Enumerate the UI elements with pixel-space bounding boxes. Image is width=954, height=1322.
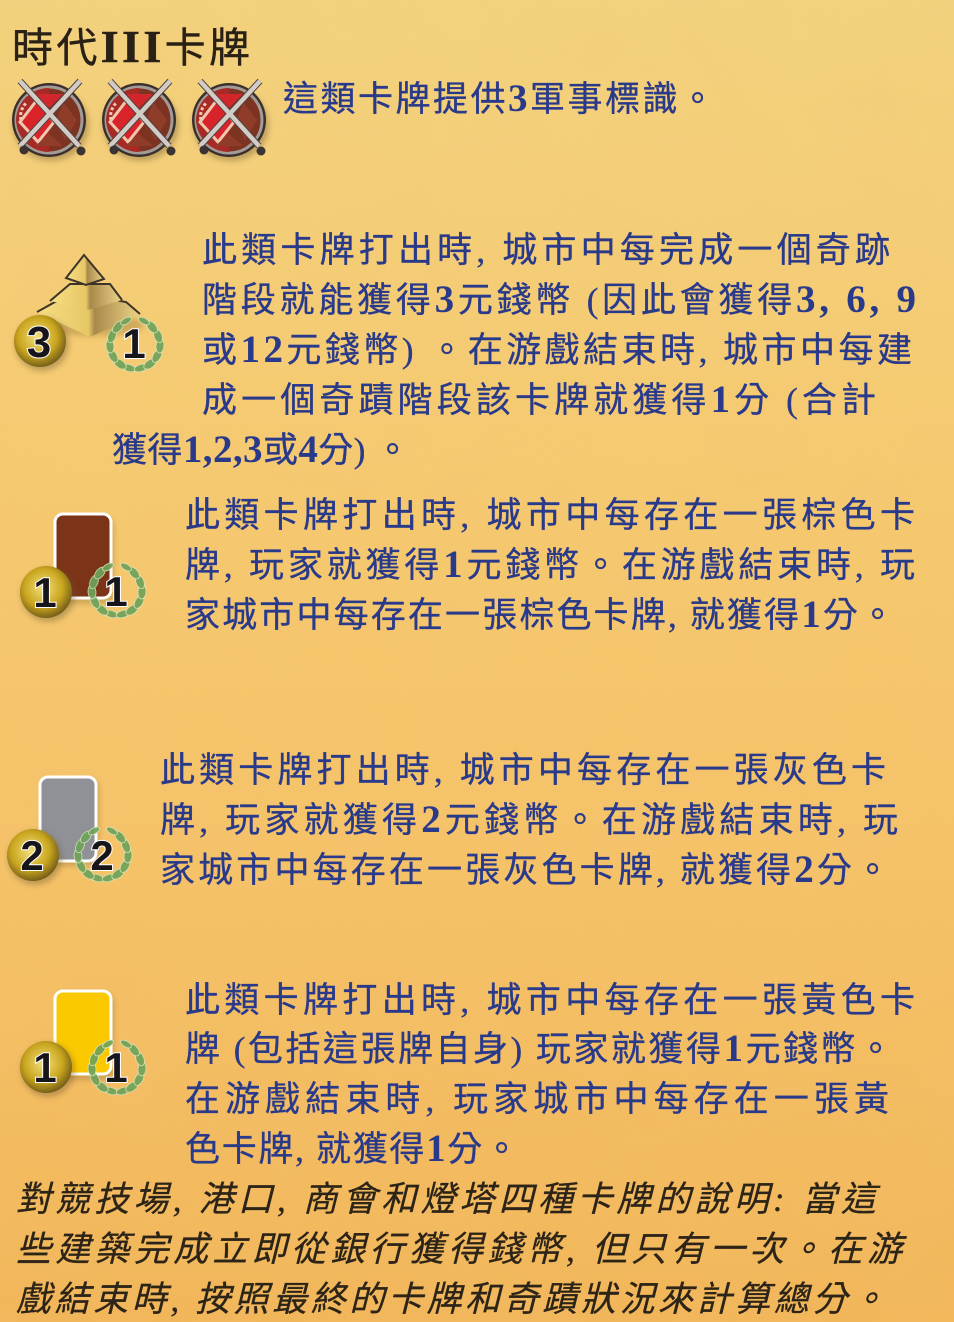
icon: grey card with coin 2 and laurel 2: 2 — [90, 832, 114, 879]
text block: brown cards — [185, 496, 915, 636]
title: 時代III卡牌 — [12, 21, 250, 72]
text block: yellow cards: 色卡牌, 就獲得1分。 — [185, 1127, 519, 1170]
icon: brown card with coin 1 and laurel 1 — [20, 514, 147, 622]
text block: wonder stage cards: 或12元錢幣) 。在游戲結束時, 城市中每建 — [202, 328, 912, 371]
icon: brown card with coin 1 and laurel 1: 1 — [33, 569, 57, 616]
icon: wonder pyramid with coin 3 and laurel 1: 3 — [27, 318, 51, 367]
text block: wonder stage cards: 成一個奇蹟階段該卡牌就獲得1分 (合計 — [202, 378, 876, 421]
icon: yellow card with coin 1 and laurel 1: 1 — [33, 1044, 57, 1091]
text block: grey cards: 家城市中每存在一張灰色卡牌, 就獲得2分。 — [160, 848, 890, 891]
icon: wonder pyramid with coin 3 and laurel 1 — [14, 255, 165, 373]
text block: wonder stage cards: 此類卡牌打出時, 城市中每完成一個奇跡 — [202, 231, 890, 270]
text block: brown cards: 家城市中每存在一張棕色卡牌, 就獲得1分。 — [185, 593, 895, 636]
text block: wonder stage cards: 獲得1,2,3或4分) 。 — [112, 428, 410, 471]
text block: yellow cards: 在游戲結束時, 玩家城市中每存在一張黃 — [185, 1080, 889, 1119]
icon: yellow card with coin 1 and laurel 1: 1 — [104, 1044, 128, 1091]
icon: brown card with coin 1 and laurel 1: 1 — [104, 568, 128, 615]
text block: wonder stage cards: 階段就能獲得3元錢幣 (因此會獲得3, 6, 9 — [202, 278, 916, 321]
note: explanation in italics: 些建築完成立即從銀行獲得錢幣, 但只有一次。在游 — [16, 1230, 907, 1269]
text: military cards: 這類卡牌提供3軍事標識。 — [283, 77, 715, 120]
note: explanation in italics — [16, 1180, 907, 1319]
text block: grey cards: 牌, 玩家就獲得2元錢幣。在游戲結束時, 玩 — [160, 798, 898, 841]
note: explanation in italics: 對競技場, 港口, 商會和燈塔四種卡牌的說明: 當這 — [16, 1180, 881, 1219]
icon: grey card with coin 2 and laurel 2: 2 — [20, 832, 44, 879]
icon: wonder pyramid with coin 3 and laurel 1: 1 — [122, 320, 146, 367]
text block: brown cards: 此類卡牌打出時, 城市中每存在一張棕色卡 — [185, 496, 915, 535]
text block: yellow cards: 此類卡牌打出時, 城市中每存在一張黃色卡 — [185, 981, 915, 1020]
icon: grey card with coin 2 and laurel 2 — [7, 777, 133, 885]
icon: yellow card with coin 1 and laurel 1 — [20, 991, 147, 1097]
icon: three military shields — [12, 81, 269, 161]
text block: grey cards — [160, 751, 898, 891]
note: explanation in italics: 戲結束時, 按照最終的卡牌和奇蹟狀況來計算總分。 — [16, 1280, 886, 1319]
text block: wonder stage cards — [112, 231, 916, 471]
text block: yellow cards: 牌 (包括這張牌自身) 玩家就獲得1元錢幣。 — [185, 1027, 893, 1070]
text block: grey cards: 此類卡牌打出時, 城市中每存在一張灰色卡 — [160, 751, 886, 790]
text block: brown cards: 牌, 玩家就獲得1元錢幣。在游戲結束時, 玩 — [185, 543, 915, 586]
text block: yellow cards — [185, 981, 915, 1170]
